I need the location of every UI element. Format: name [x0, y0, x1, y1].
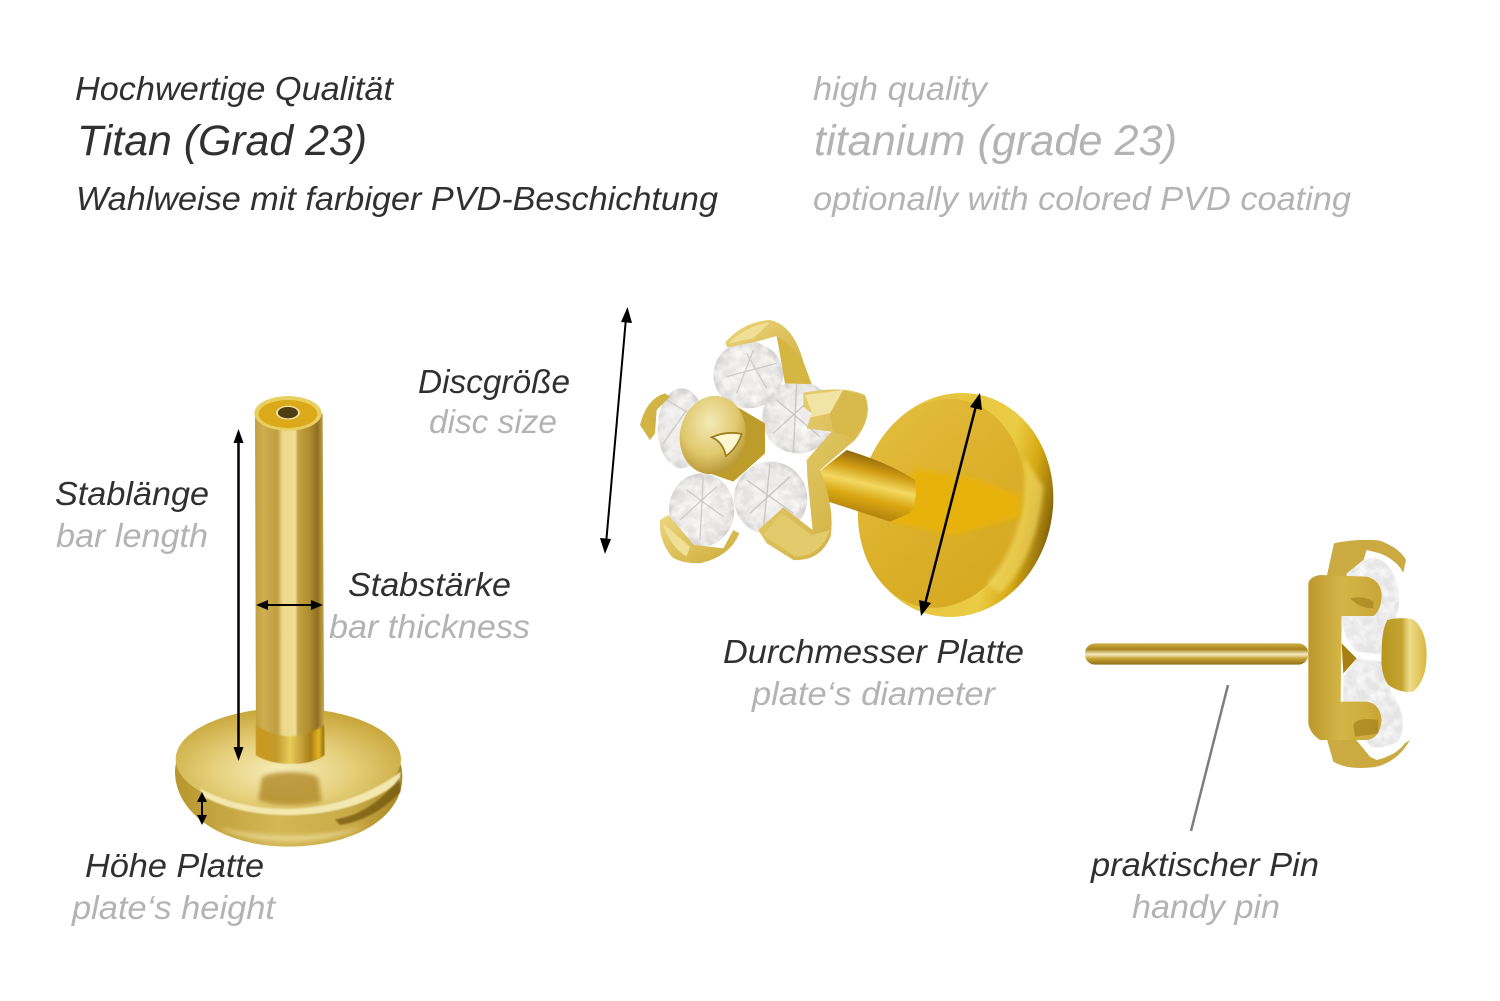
center hub	[1342, 643, 1357, 673]
text: coating note German: Wahlweise mit farbiger PVD-Beschichtung	[76, 180, 719, 217]
heading block: German	[75, 70, 719, 217]
stone top	[713, 342, 783, 408]
heading: high quality German: Hochwertige Qualität	[75, 70, 395, 107]
heading: material German: Titan (Grad 23)	[77, 117, 367, 165]
heading: material English: titanium (grade 23)	[814, 117, 1177, 165]
rear top prong	[1327, 540, 1406, 577]
disc plate	[838, 375, 1074, 635]
bar top end	[254, 396, 322, 431]
bar base reflection	[256, 725, 324, 764]
prong top arc	[725, 320, 812, 384]
stone lower right	[734, 462, 807, 535]
flower labret illustration	[640, 320, 1074, 635]
rear bottom prong	[1327, 738, 1410, 768]
plate face	[839, 383, 1044, 624]
label: disc size: Discgröße	[418, 363, 570, 400]
arrow: plate height	[197, 792, 207, 825]
heading: high quality English: high quality	[813, 70, 990, 107]
label: disc size: disc size	[429, 403, 557, 440]
heading block: English	[813, 70, 1352, 217]
label: plate diameter	[723, 633, 1024, 712]
arrow: plate diameter	[919, 393, 982, 616]
label: bar thickness	[329, 566, 530, 645]
connecting bar	[817, 450, 916, 522]
prong lower left	[660, 515, 739, 563]
label: bar length	[55, 475, 209, 554]
bar reflection on plate	[890, 468, 1020, 535]
plate rim	[838, 375, 1074, 635]
label: plate height	[71, 847, 277, 926]
label: handy pin: praktischer Pin	[1090, 846, 1319, 883]
flower top	[640, 320, 868, 563]
labret post illustration	[175, 396, 402, 847]
arrow: bar length	[234, 429, 244, 761]
bar	[255, 413, 324, 764]
label: handy pin	[1090, 846, 1319, 925]
upper stone	[1342, 558, 1399, 655]
main back plate	[1308, 575, 1382, 740]
label: bar thickness: Stabstärke	[348, 566, 511, 603]
label: plate height: Höhe Platte	[85, 847, 264, 884]
arrow: bar thickness	[256, 600, 323, 610]
label: plate diameter: plate‘s diameter	[751, 675, 997, 712]
arrow: disc size	[600, 307, 632, 554]
stones side	[1342, 558, 1403, 748]
prong right and right arm	[758, 389, 868, 560]
label: plate diameter: Durchmesser Platte	[723, 633, 1024, 670]
label: bar thickness: bar thickness	[329, 608, 530, 645]
center hub	[700, 407, 765, 482]
prong left	[640, 393, 670, 440]
label: bar length: bar length	[56, 517, 208, 554]
lower stone	[1343, 658, 1403, 748]
side ball	[1381, 618, 1427, 692]
label: handy pin: handy pin	[1132, 888, 1280, 925]
side view illustration with pin	[1085, 540, 1427, 768]
plate top surface	[176, 708, 401, 811]
bar thread hole	[276, 406, 300, 420]
stone left	[658, 388, 706, 468]
pointer line: handy pin	[1191, 685, 1228, 831]
plate rim	[175, 708, 402, 847]
label: bar length: Stablänge	[55, 475, 209, 512]
center ball	[673, 390, 753, 480]
label: plate height: plate‘s height	[71, 889, 277, 926]
stone right	[762, 381, 834, 453]
pin	[1085, 643, 1308, 665]
label: disc size	[418, 363, 570, 440]
text: coating note English: optionally with colored PVD coating	[813, 180, 1352, 217]
stone lower left	[669, 473, 734, 547]
